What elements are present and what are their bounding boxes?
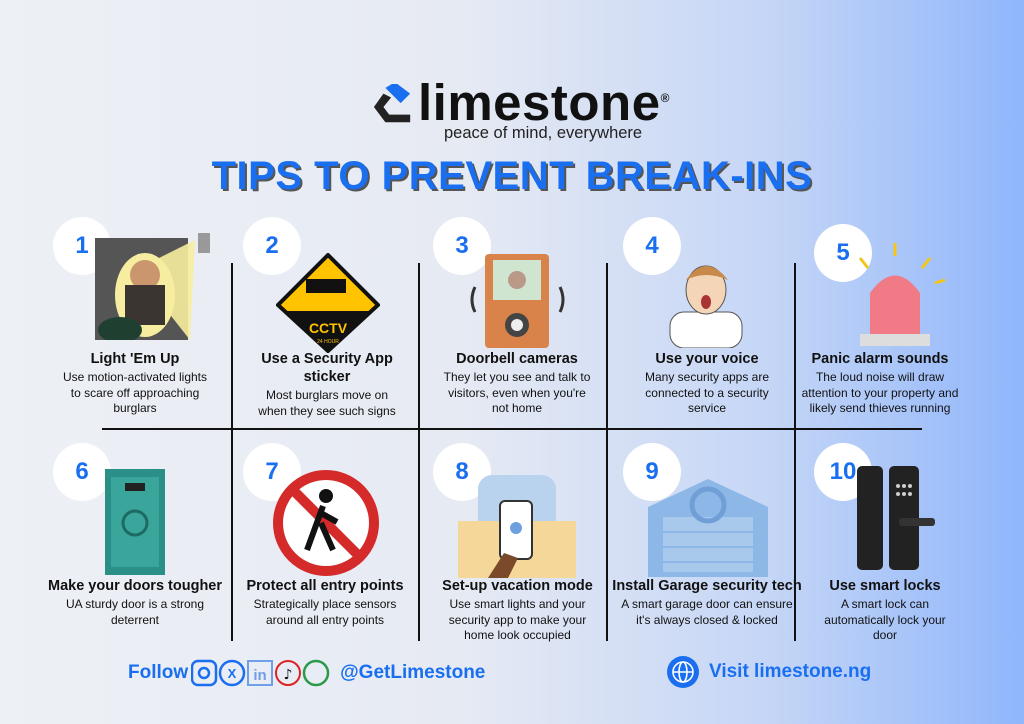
icon: no entry sign: [273, 470, 379, 576]
number 6: 6: [75, 458, 89, 485]
tip 5: The loud noise will draw: [816, 370, 944, 384]
number 10: 10: [830, 458, 856, 485]
number 5: [814, 224, 872, 282]
tip 9: A smart garage door can ensure: [621, 597, 793, 611]
tip 3: They let you see and talk to: [444, 370, 590, 384]
icon: social icons: X: [228, 666, 237, 681]
tip 3: [444, 351, 590, 415]
tip 1: burglars: [113, 401, 157, 415]
icon: siren: [858, 243, 946, 346]
tip 2: Most burglars move on: [266, 388, 388, 402]
icon: CCTV sign: CCTV: [309, 320, 348, 336]
brand name: limestone®: [418, 74, 670, 131]
number 9: 9: [645, 458, 659, 485]
icon: logo mark: [374, 84, 410, 122]
tip 6: Make your doors tougher: [48, 578, 222, 594]
tip 2: sticker: [304, 369, 350, 385]
tip 10: automatically lock your: [824, 612, 946, 626]
tip 10: Use smart locks: [829, 578, 941, 594]
number 2: [243, 217, 301, 275]
number 7: 7: [265, 458, 279, 485]
tip 8: Set-up vacation mode: [442, 578, 593, 594]
number 8: [433, 443, 491, 501]
icon: burglar in spotlight: [95, 233, 210, 340]
tip 1: [63, 351, 207, 415]
icon: social icons: [191, 660, 330, 686]
number 9: [623, 443, 681, 501]
tip 9: Install Garage security tech: [612, 578, 802, 594]
tip 1: to scare off approaching: [71, 386, 199, 400]
number 5: 5: [836, 239, 850, 266]
icon: smart lock: [857, 466, 935, 570]
tip 3: Doorbell cameras: [456, 351, 578, 367]
icon: CCTV sign: 24 HOUR: [317, 339, 339, 345]
tip 7: [246, 578, 404, 626]
tip 2: when they see such signs: [258, 404, 396, 418]
icon: doorbell camera: [470, 254, 564, 348]
number 8: 8: [455, 458, 469, 485]
number 1: 1: [75, 232, 89, 259]
tip 9: [612, 578, 802, 626]
title: TIPS TO PREVENT BREAK-INS: [212, 154, 812, 198]
footer: website: Visit limestone.ng: [709, 661, 871, 682]
logo: [374, 74, 670, 142]
number 7: [243, 443, 301, 501]
tip 5: [802, 351, 958, 415]
tip 6: [48, 578, 222, 626]
icon: garage: [648, 479, 768, 577]
tip 10: door: [873, 628, 897, 642]
tip 4: [645, 351, 769, 415]
tip 1: Light 'Em Up: [91, 351, 179, 367]
footer: follow: [128, 660, 485, 686]
number 10: [814, 443, 872, 501]
number 6: [53, 443, 111, 501]
tip 9: it's always closed & locked: [636, 612, 778, 626]
icon: CCTV sign: [276, 253, 380, 353]
number 1: [53, 217, 111, 275]
icon: safe door: [105, 469, 165, 575]
icon: phone in hand: [458, 475, 576, 578]
icon: social icons: ♪: [284, 667, 293, 683]
icon: shouting man: [670, 266, 742, 348]
tip 4: connected to a security: [645, 386, 769, 400]
tip 4: Many security apps are: [645, 370, 769, 384]
tip 8: home look occupied: [464, 628, 571, 642]
tip 7: Protect all entry points: [246, 578, 404, 594]
tip 8: security app to make your: [449, 612, 586, 626]
tip 4: service: [688, 401, 726, 415]
number 4: 4: [645, 232, 659, 259]
number 4: [623, 217, 681, 275]
tip 10: [824, 578, 946, 642]
footer: follow: @GetLimestone: [340, 662, 485, 683]
tip 2: [258, 351, 396, 418]
tip 3: not home: [492, 401, 542, 415]
tip 1: Use motion-activated lights: [63, 370, 207, 384]
footer: website: [667, 656, 871, 688]
tip 6: deterrent: [111, 612, 159, 626]
icon: social icons: in: [253, 667, 267, 684]
tip 3: visitors, even when you're: [448, 386, 586, 400]
tip 7: around all entry points: [266, 612, 384, 626]
tip 7: Strategically place sensors: [254, 597, 396, 611]
tip 5: attention to your property and: [802, 386, 958, 400]
tip 8: Use smart lights and your: [449, 597, 586, 611]
tip 5: Panic alarm sounds: [812, 351, 948, 367]
number 3: 3: [455, 232, 469, 259]
number 3: [433, 217, 491, 275]
tip 6: UA sturdy door is a strong: [66, 597, 204, 611]
tagline: peace of mind, everywhere: [444, 124, 642, 142]
tip 5: likely send thieves running: [810, 401, 950, 415]
number 2: 2: [265, 232, 279, 259]
tip 4: Use your voice: [655, 351, 759, 367]
icon: globe: [667, 656, 699, 688]
tip 10: A smart lock can: [841, 597, 929, 611]
tip 2: Use a Security App: [261, 351, 393, 367]
footer: follow: Follow: [128, 662, 188, 683]
tip 8: [442, 578, 593, 642]
